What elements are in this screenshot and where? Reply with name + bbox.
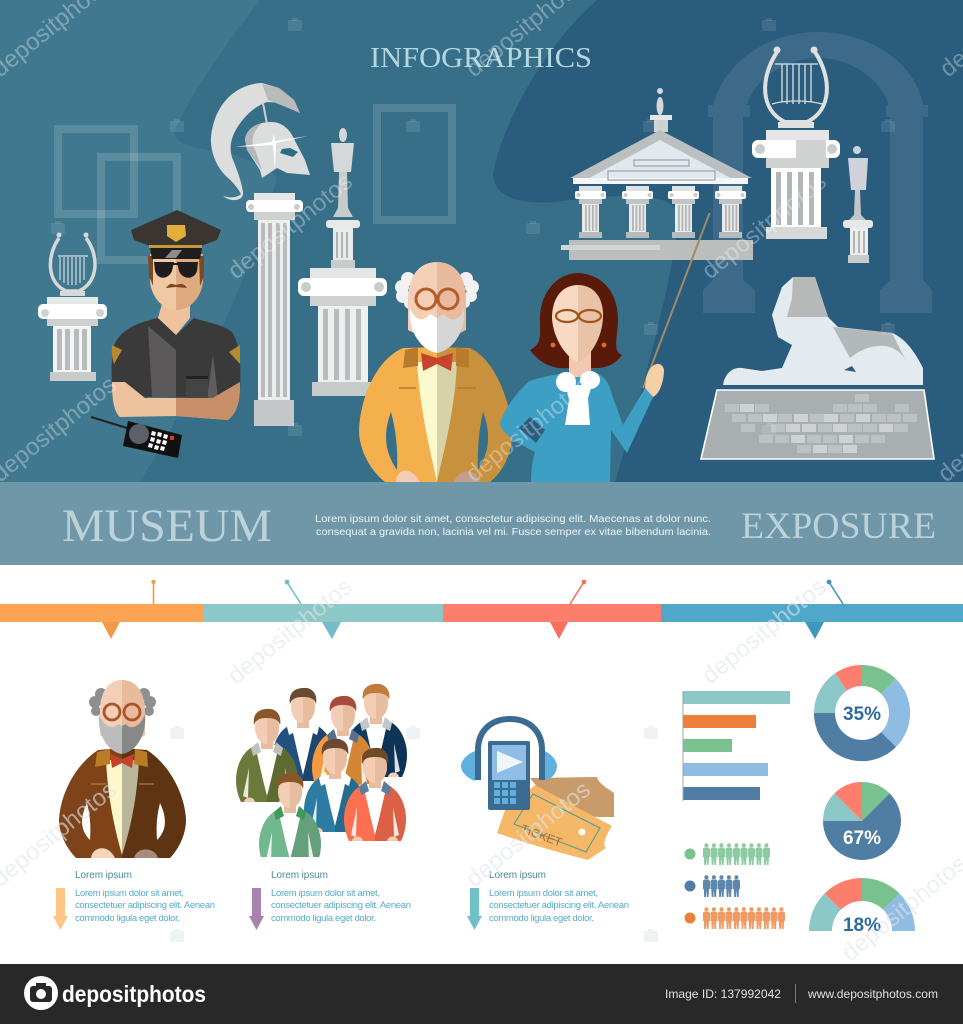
watermark camera icons bbox=[51, 18, 895, 436]
officer crossed arms bbox=[112, 382, 240, 420]
officer neck and face bbox=[158, 300, 190, 335]
icon: spartan helmet bbox=[211, 83, 310, 200]
teacher jabot bbox=[556, 371, 600, 425]
teacher dress bbox=[500, 372, 653, 482]
tall column with helmet bbox=[211, 83, 310, 426]
icon: lyre right bbox=[765, 46, 827, 128]
officer shirt bbox=[112, 318, 240, 398]
headphones bbox=[478, 719, 542, 780]
watermarks: hero and banner: depositphotos bbox=[461, 371, 596, 488]
footer bar bbox=[0, 964, 963, 1024]
footer url: www.depositphotos.com bbox=[807, 987, 938, 1001]
banner description text: Lorem ipsum dolor sit amet, consectetur adipiscing elit. Maecenas at dolor nunc. bbox=[315, 513, 711, 525]
column 3 caption: Lorem ipsum dolor sit amet, bbox=[489, 888, 598, 899]
semi-donut chart 18%: 18% bbox=[843, 915, 881, 936]
pie chart 67% bbox=[823, 782, 901, 860]
small statue right bbox=[843, 146, 873, 263]
banner heading: museum: MUSEUM bbox=[62, 500, 272, 552]
column 2 caption: consectetuer adipiscing elit. Aenean bbox=[271, 900, 411, 911]
banner heading: exposure: EXPOSURE bbox=[741, 506, 936, 547]
icon: sphinx on plinth bbox=[701, 277, 934, 459]
icon: greek temple bbox=[561, 88, 753, 260]
column 3 caption: commodo ligula eget dolor. bbox=[489, 913, 594, 924]
column 1 caption: consectetuer adipiscing elit. Aenean bbox=[75, 900, 215, 911]
column 1 caption: Lorem ipsum bbox=[75, 870, 132, 881]
watermarks: hero and banner: depositphotos bbox=[697, 168, 832, 285]
sphinx body bbox=[723, 277, 923, 385]
bar chart bbox=[682, 691, 790, 801]
banner description text bbox=[315, 513, 711, 538]
column 1 caption: commodo ligula eget dolor. bbox=[75, 913, 180, 924]
column 2 caption: Lorem ipsum bbox=[271, 870, 328, 881]
brown jacket bbox=[59, 748, 122, 858]
front ticket bbox=[497, 785, 612, 860]
icon: walkie talkie radio bbox=[91, 417, 182, 458]
icon: audio guide and tickets bbox=[461, 719, 614, 860]
teacher neck and face bbox=[569, 350, 591, 377]
column 2: visitor group bbox=[236, 684, 407, 866]
arrow: orange down bbox=[53, 888, 68, 930]
column 1 caption bbox=[75, 870, 215, 924]
timeline pins and pointers bbox=[102, 580, 843, 639]
officer cap bbox=[131, 210, 221, 246]
arrow: teal down bbox=[467, 888, 482, 930]
people count: green row bbox=[684, 843, 770, 865]
back ticket bbox=[530, 777, 614, 817]
watermarks: white area: depositphotos bbox=[697, 573, 832, 690]
watermarks: hero and banner bbox=[0, 0, 963, 488]
column 2 caption: Lorem ipsum dolor sit amet, bbox=[271, 888, 380, 899]
column 3 caption: consectetuer adipiscing elit. Aenean bbox=[489, 900, 629, 911]
pointer stick bbox=[643, 213, 710, 388]
column 3 caption: Lorem ipsum bbox=[489, 870, 546, 881]
semi-donut chart 18% bbox=[809, 878, 915, 936]
donut chart 35% bbox=[814, 665, 910, 761]
watermarks: white area bbox=[0, 573, 963, 967]
footer logo icon bbox=[24, 976, 58, 1010]
pie chart 67%: 67% bbox=[843, 828, 881, 849]
people count: orange row bbox=[684, 907, 785, 929]
audio player bbox=[488, 741, 530, 810]
teacher hair bbox=[530, 273, 622, 368]
ticket label: TICKET bbox=[519, 822, 564, 850]
banner description text: consequat a gravida non, lacinia vel mi. Fusce semper ex vitae bibendum lacinia. bbox=[316, 526, 711, 538]
column 2 caption: commodo ligula eget dolor. bbox=[271, 913, 376, 924]
column with statue bbox=[298, 128, 387, 396]
professor jacket bbox=[359, 347, 437, 482]
column 3 caption bbox=[489, 870, 629, 924]
professor in yellow jacket bbox=[359, 262, 512, 482]
people count: blue row bbox=[684, 875, 740, 897]
title: INFOGRAPHICS bbox=[370, 42, 592, 74]
bald head bbox=[89, 688, 156, 716]
watermarks: white area: depositphotos bbox=[223, 573, 358, 690]
banner band bbox=[0, 482, 963, 565]
watermarks: hero and banner: depositphotos bbox=[223, 168, 358, 285]
column 2 caption bbox=[271, 870, 411, 924]
watermarks: white area: depositphotos bbox=[461, 776, 596, 893]
column right bbox=[752, 130, 840, 239]
timeline ribbon bbox=[0, 580, 963, 639]
teacher with pointer bbox=[500, 273, 664, 482]
watermark camera icons on white bbox=[170, 726, 658, 942]
column 1: professor portrait bbox=[59, 680, 186, 858]
footer brand name: depositphotos bbox=[62, 981, 206, 1007]
donut chart 35%: 35% bbox=[843, 704, 881, 725]
icon: lyre left bbox=[50, 232, 95, 296]
professor head bbox=[395, 272, 479, 309]
police officer bbox=[112, 210, 240, 420]
column 1 caption: Lorem ipsum dolor sit amet, bbox=[75, 888, 184, 899]
teacher hand bbox=[645, 364, 664, 397]
plinth bricks bbox=[725, 394, 917, 453]
temple columns bbox=[575, 186, 746, 238]
arrow: purple down bbox=[249, 888, 264, 930]
footer image id: Image ID: 137992042 bbox=[665, 987, 781, 1001]
column left bbox=[38, 297, 107, 381]
panel: museum hero background bbox=[0, 0, 963, 482]
